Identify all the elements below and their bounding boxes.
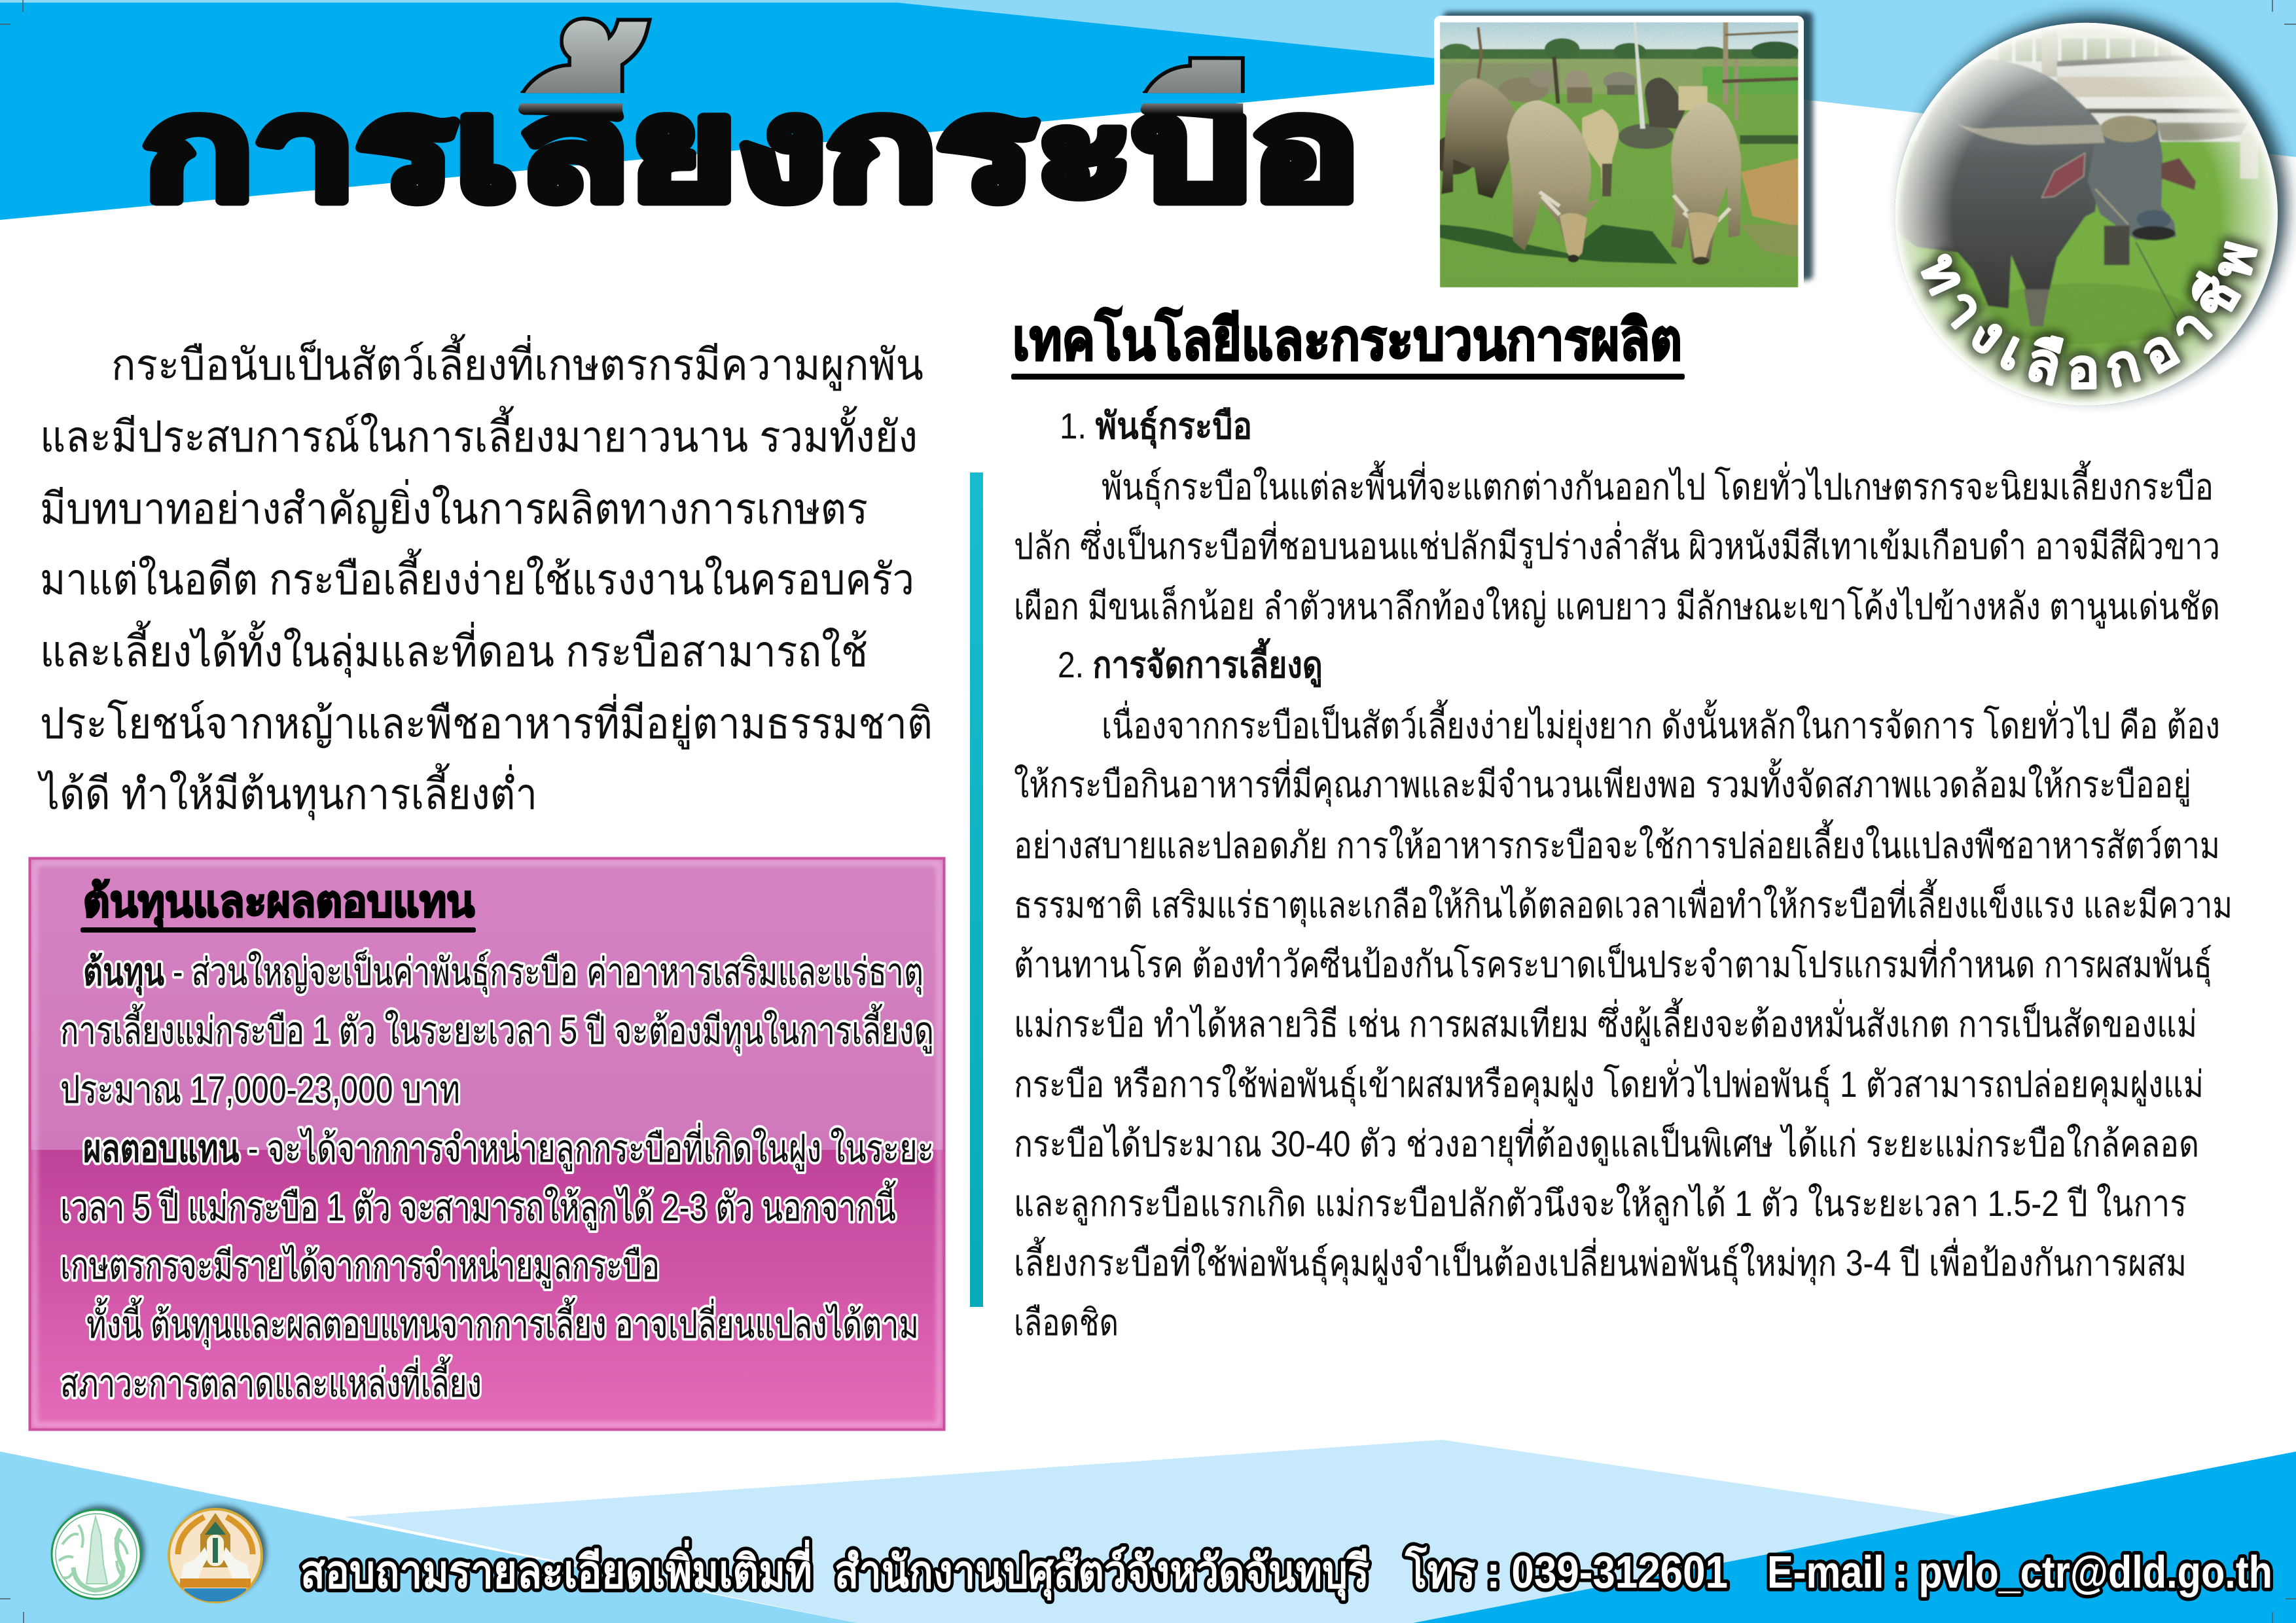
heading: technology and production: เทคโนโลยีและกระบวนการผลิต [1013, 307, 1682, 372]
footer contact line: โทร : 039-312601 [1405, 1545, 1728, 1597]
footer contact line: สำนักงานปศุสัตว์จังหวัดจันทบุรี [834, 1546, 1369, 1601]
section 1: buffalo breeds [1014, 405, 2220, 629]
background: bottom left light blue wedge [0, 1452, 857, 1623]
teal vertical divider [970, 473, 983, 1307]
panel body text: เวลา 5 ปี แม่กระบือ 1 ตัว จะสามารถให้ลูกได้ 2-3 ตัว นอกจากนี้ [60, 1181, 896, 1230]
icon: green department seal [52, 1506, 145, 1599]
title: การเลี้ยงกระบือ [143, 46, 1360, 228]
panel heading: ต้นทุนและผลตอบแทน [83, 877, 475, 929]
panel body text: สภาวะการตลาดและแหล่งที่เลี้ยง [60, 1357, 482, 1405]
background: top dark blue wedge [0, 0, 1568, 220]
photo: grazing buffalo herd [1432, 12, 1813, 288]
panel body text [60, 950, 934, 1405]
label on circle: career path text: ทางเลือกอาชีพ [1920, 241, 2258, 390]
footer contact line [300, 1539, 2272, 1601]
background: bottom right dark blue wedge [1413, 1452, 2296, 1623]
intro paragraph: ได้ดี ทำให้มีต้นทุนการเลี้ยงต่ำ [37, 763, 537, 821]
photo: water buffalo in circular frame [1891, 2, 2296, 410]
intro paragraph: และเลี้ยงได้ทั้งในลุ่มและที่ดอน กระบือสามารถใช้ [40, 620, 868, 678]
panel body text: เกษตรกรจะมีรายได้จากการจำหน่ายมูลกระบือ [60, 1244, 660, 1289]
intro paragraph [37, 334, 933, 821]
intro paragraph: และมีประสบการณ์ในการเลี้ยงมายาวนาน รวมทั้งยัง [40, 406, 918, 461]
section 2: husbandry management: เลือดชิด [1014, 1302, 1119, 1343]
section 1: buffalo breeds: 1. พันธุ์กระบือ [1060, 405, 1252, 449]
title: การเลี้ยงกระบือ [143, 25, 1360, 257]
panel: costs and returns [29, 857, 945, 1431]
label on circle: career path text: ทางเลือกอาชีพ [1910, 231, 2269, 401]
intro paragraph: กระบือนับเป็นสัตว์เลี้ยงที่เกษตรกรมีความผูกพัน [111, 334, 924, 391]
intro paragraph: มีบทบาทอย่างสำคัญยิ่งในการผลิตทางการเกษตร [40, 479, 868, 533]
panel body text: ผลตอบแทน - จะได้จากการจำหน่ายลูกกระบือที่เกิดในฝูง ในระยะ [83, 1122, 934, 1171]
panel body text: การเลี้ยงแม่กระบือ 1 ตัว ในระยะเวลา 5 ปี จะต้องมีทุนในการเลี้ยงดู [60, 1004, 934, 1054]
background: bottom pale blue shape [344, 1440, 1962, 1623]
panel body text: ทั้งนี้ ต้นทุนและผลตอบแทนจากการเลี้ยง อาจเปลี่ยนแปลงได้ตาม [86, 1298, 919, 1348]
intro paragraph: มาแต่ในอดีต กระบือเลี้ยงง่ายใช้แรงงานในครอบครัว [40, 548, 914, 603]
title [143, 17, 1354, 207]
footer contact line: สอบถามรายละเอียดเพิ่มเติมที่ [300, 1539, 812, 1597]
section 2: husbandry management [1014, 638, 2233, 1343]
intro paragraph: ประโยชน์จากหญ้าและพืชอาหารที่มีอยู่ตามธรรมชาติ [40, 694, 933, 750]
title: การเลี้ยงกระบือ [143, 25, 1360, 257]
panel body text: ประมาณ 17,000-23,000 บาท [60, 1069, 460, 1111]
icon: provincial livestock seal [169, 1505, 266, 1602]
section 2: husbandry management: 2. การจัดการเลี้ยงดู [1058, 638, 1323, 688]
panel body text: ต้นทุน - ส่วนใหญ่จะเป็นค่าพันธุ์กระบือ ค่าอาหารเสริมและแร่ธาตุ [83, 950, 924, 996]
background: top light blue wedge [872, 0, 2296, 157]
